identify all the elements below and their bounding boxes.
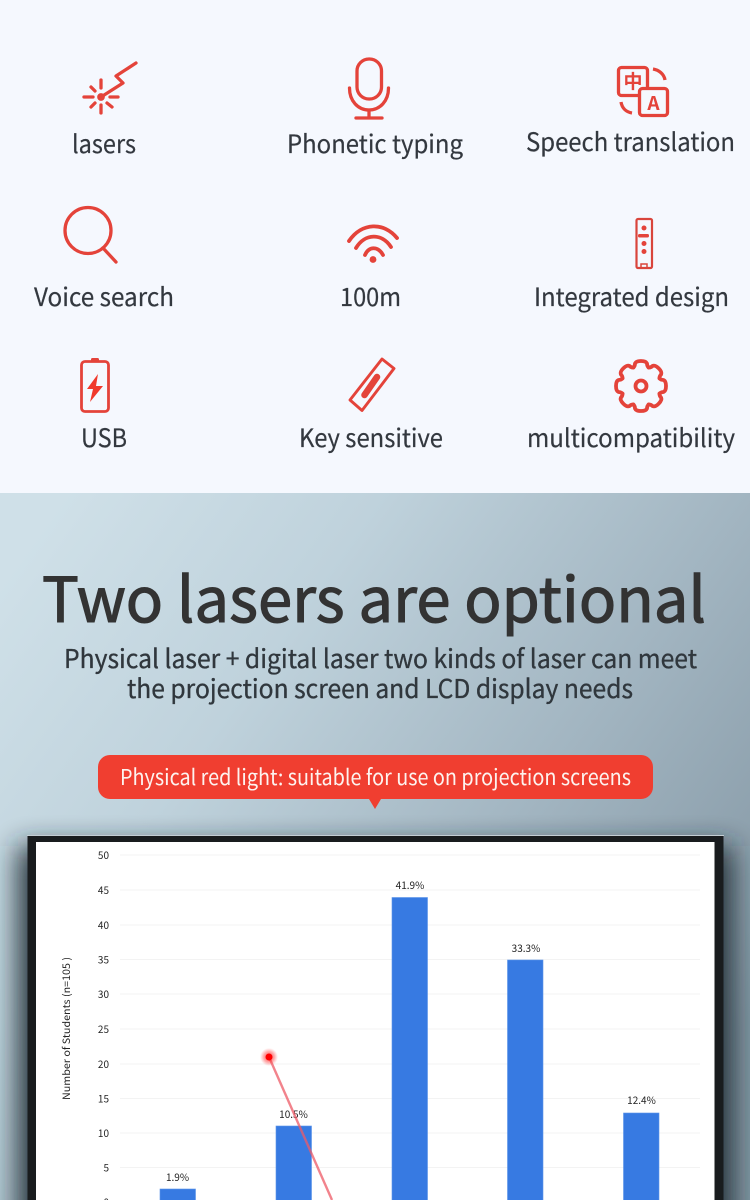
callout — [98, 755, 653, 809]
feature: speech translation — [526, 67, 735, 159]
callout: Physical red light: suitable for use on projection screens — [120, 760, 631, 792]
feature: voice search — [34, 208, 174, 314]
bar values: 10.5% — [279, 1106, 308, 1121]
bar values: 12.4% — [627, 1092, 656, 1107]
bar values: 1.9% — [166, 1169, 189, 1184]
feature: USB — [81, 358, 127, 455]
y axis labels — [98, 847, 109, 1200]
y axis labels: 15 — [98, 1090, 109, 1106]
title: Two lasers are optional — [42, 550, 706, 640]
feature: phonetic typing — [287, 59, 463, 161]
icon: microphone — [350, 59, 388, 118]
y axis labels: 5 — [103, 1160, 109, 1174]
icon: translate: A — [646, 89, 660, 116]
label: multicompatibility: multicompatibility — [527, 419, 735, 455]
y axis labels: 20 — [98, 1056, 109, 1071]
bar values: 41.9% — [396, 877, 424, 892]
subtitle: Physical laser + digital laser two kinds of laser can meet — [64, 639, 697, 676]
subtitle — [64, 639, 697, 706]
icon: translate — [618, 67, 668, 116]
feature: integrated design — [534, 219, 729, 314]
laser pointer — [260, 1048, 332, 1200]
y axis labels: 45 — [98, 882, 109, 897]
monitor — [27, 835, 724, 1200]
icon: magnifier — [65, 208, 116, 262]
icon: gear — [616, 361, 666, 411]
icon: remote — [636, 219, 652, 268]
panel: feature icons — [0, 0, 750, 493]
y axis labels: 40 — [98, 917, 109, 932]
icon: translate: 中 — [623, 67, 643, 94]
y axis labels: 35 — [98, 952, 109, 966]
feature: lasers — [72, 63, 136, 161]
icon: key — [350, 359, 394, 410]
bar values: 33.3% — [512, 940, 540, 955]
y axis labels: 30 — [98, 986, 109, 1001]
y axis labels: 25 — [98, 1021, 109, 1036]
feature: multicompatibility — [527, 361, 735, 455]
label: 100m: 100m — [340, 278, 401, 314]
y axis labels: 50 — [98, 847, 109, 862]
label: lasers: lasers — [72, 125, 136, 161]
monitor shadow — [18, 846, 732, 1200]
y axis title: Number of Students (n=105 ) — [58, 957, 73, 1100]
bar values — [166, 877, 656, 1184]
label: voice search: Voice search — [34, 278, 174, 314]
label: USB: USB — [81, 419, 127, 455]
icon: laser — [84, 63, 136, 113]
feature: 100m — [340, 226, 401, 314]
icon: battery — [82, 358, 108, 412]
label: phonetic typing: Phonetic typing — [287, 125, 463, 161]
label: speech translation: Speech translation — [526, 123, 735, 159]
label: key sensitive: Key sensitive — [299, 419, 443, 455]
icon: wifi — [349, 226, 397, 263]
panel: two lasers section — [0, 493, 750, 1200]
bar chart — [58, 847, 700, 1200]
subtitle: the projection screen and LCD display needs — [127, 669, 633, 706]
feature: key sensitive — [299, 359, 443, 455]
bars — [160, 898, 659, 1200]
label: integrated design: Integrated design — [534, 278, 729, 314]
y axis labels: 10 — [98, 1125, 109, 1140]
